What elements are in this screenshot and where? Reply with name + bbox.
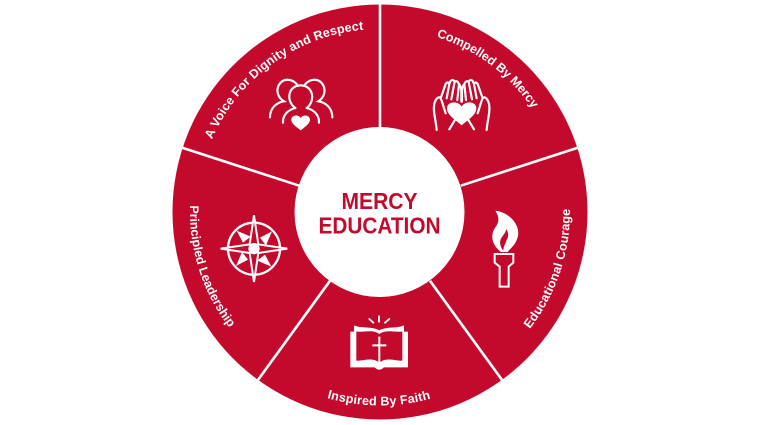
icon: three people with heart bbox=[270, 80, 332, 130]
segment label: Compelled By Mercy: Compelled By Mercy bbox=[438, 30, 538, 107]
center circle: Mercy Education: EDUCATION bbox=[318, 212, 440, 238]
wheel: red disc with five segments bbox=[172, 0, 588, 420]
icon: flaming torch bbox=[492, 211, 518, 287]
icon: compass rose bbox=[221, 215, 287, 282]
segment label: A Voice For Dignity and Respect: A Voice For Dignity and Respect bbox=[206, 22, 364, 140]
icon: open hands holding heart bbox=[434, 80, 489, 130]
segment label: Educational Courage: Educational Courage bbox=[523, 209, 572, 328]
center circle: Mercy Education: MERCY bbox=[342, 188, 418, 214]
center circle: Mercy Education bbox=[294, 127, 464, 297]
segment label: Inspired By Faith: Inspired By Faith bbox=[328, 390, 430, 408]
segment label: Principled Leadership: Principled Leadership bbox=[190, 206, 234, 326]
icon: open book with cross bbox=[350, 316, 408, 370]
